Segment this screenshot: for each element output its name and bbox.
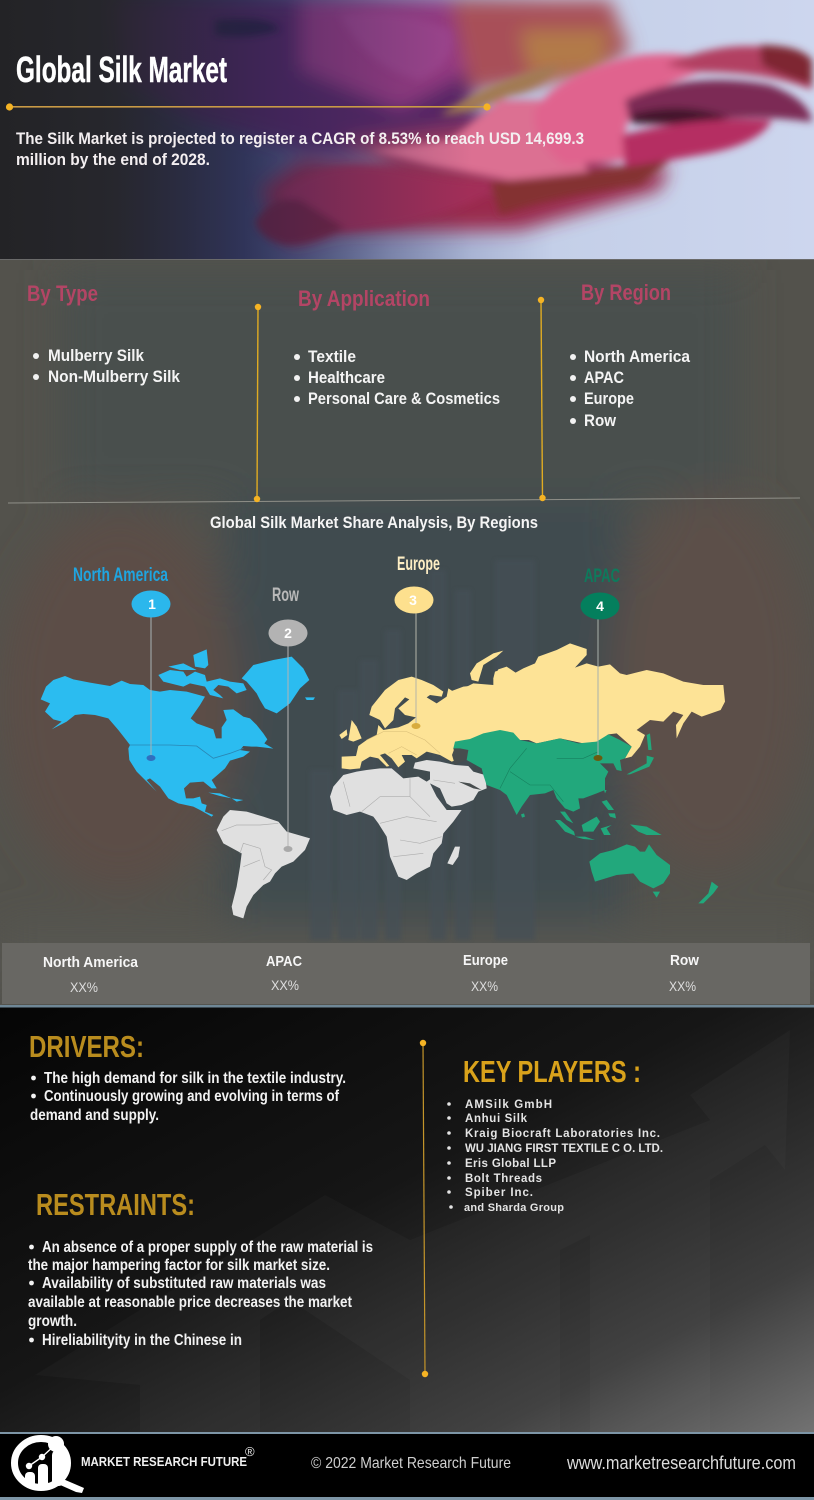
column: By Region: APAC — [584, 369, 624, 387]
restraints: Availability of substituted raw materials was — [42, 1275, 326, 1292]
key players: Kraig Biocraft Laboratories Inc. — [465, 1128, 660, 1140]
title: Global Silk Market — [16, 49, 227, 90]
panel: drivers, restraints, key players — [0, 1005, 814, 1432]
pin 2: Row — [268, 585, 308, 646]
pin 3: Europe: Europe — [397, 554, 440, 575]
pin 3: Europe — [394, 554, 440, 614]
share table: XX% — [471, 978, 498, 994]
region: Europe and Russia — [339, 643, 725, 769]
drivers: Continuously growing and evolving in terms of — [44, 1088, 340, 1105]
drivers: The high demand for silk in the textile industry. — [44, 1070, 346, 1087]
column: By Type — [27, 281, 181, 386]
share table: North America — [43, 954, 139, 971]
column: By Application: By Application — [298, 286, 430, 311]
footer: www.marketresearchfuture.com — [566, 1453, 796, 1473]
region: South America — [217, 810, 310, 918]
vertical divider left — [254, 304, 261, 502]
key players: Anhui Silk — [465, 1113, 528, 1125]
drivers: DRIVERS: — [29, 1029, 144, 1064]
logo — [14, 1436, 84, 1493]
chart heading: Global Silk Market Share Analysis, By Regions — [210, 513, 538, 532]
region: APAC — [453, 730, 718, 903]
region: Africa and Middle East — [330, 760, 487, 880]
divider line with end dots — [6, 103, 491, 111]
footer: MARKET RESEARCH FUTURE — [81, 1455, 247, 1469]
key players: WU JIANG FIRST TEXTILE C O. LTD. — [465, 1143, 663, 1155]
pin 4: APAC: 4 — [596, 598, 604, 614]
pin 1: North America: 1 — [148, 596, 156, 612]
column: By Region: Row — [584, 412, 616, 430]
column: By Application: Textile — [308, 348, 356, 366]
region: North America — [41, 649, 315, 817]
key players: KEY PLAYERS : — [463, 1054, 641, 1089]
share table — [2, 943, 810, 1004]
footer: © 2022 Market Research Future — [311, 1455, 511, 1472]
key players: AMSilk GmbH — [465, 1099, 552, 1111]
text block: market summary: The Silk Market is projected to register a CAGR of 8.53% to reach USD 14,699.3 — [16, 129, 584, 148]
share table: Europe — [463, 952, 508, 969]
pin lines and markers — [146, 613, 602, 852]
pin 4: APAC: APAC — [584, 566, 620, 587]
text block: market summary — [16, 129, 584, 169]
pin 3: Europe: 3 — [409, 592, 417, 608]
restraints: Hireliabilityity in the Chinese in — [42, 1332, 242, 1349]
pin 2: Row: Row — [272, 585, 299, 606]
pin 1: North America — [73, 565, 170, 618]
pin 1: North America: North America — [73, 565, 168, 586]
column: By Application: Personal Care & Cosmetics — [308, 390, 500, 408]
column: By Region: Europe — [584, 390, 634, 408]
column: By Type: Non-Mulberry Silk — [48, 368, 181, 386]
key players: Bolt Threads — [465, 1173, 542, 1185]
pin 2: Row: 2 — [284, 625, 292, 641]
panel: hero header with silk photo — [0, 0, 814, 261]
drivers — [29, 1029, 346, 1124]
caspian sea — [452, 747, 472, 765]
panel: segments and map background — [0, 260, 814, 1005]
share table: XX% — [669, 978, 696, 994]
column: By Type: By Type — [27, 281, 98, 306]
key players — [447, 1054, 663, 1214]
column: By Application — [294, 286, 500, 408]
footer: ® — [245, 1444, 255, 1459]
share table: Row — [670, 952, 699, 969]
drivers: demand and supply. — [30, 1107, 159, 1124]
restraints — [28, 1187, 373, 1349]
column: By Region — [570, 280, 691, 430]
share table: APAC — [266, 953, 302, 970]
key players: Eris Global LLP — [465, 1158, 556, 1170]
key players: and Sharda Group — [464, 1202, 564, 1214]
world map — [41, 643, 725, 918]
pin 4: APAC — [580, 566, 620, 620]
restraints: the major hampering factor for silk market size. — [28, 1257, 330, 1274]
restraints: RESTRAINTS: — [36, 1187, 195, 1222]
column: By Application: Healthcare — [308, 369, 385, 387]
restraints: An absence of a proper supply of the raw material is — [42, 1239, 373, 1256]
text block: market summary: million by the end of 2028. — [16, 150, 210, 169]
column: By Region: By Region — [581, 280, 671, 305]
vertical divider — [420, 1040, 428, 1377]
column: By Type: Mulberry Silk — [48, 347, 145, 365]
share table: XX% — [271, 977, 299, 993]
footer — [0, 1432, 814, 1500]
restraints: available at reasonable price decreases the market — [28, 1294, 352, 1311]
share table: XX% — [70, 979, 98, 995]
column: By Region: North America — [584, 348, 691, 366]
restraints: growth. — [28, 1313, 77, 1330]
vertical divider right — [538, 297, 546, 501]
key players: Spiber Inc. — [465, 1187, 533, 1199]
